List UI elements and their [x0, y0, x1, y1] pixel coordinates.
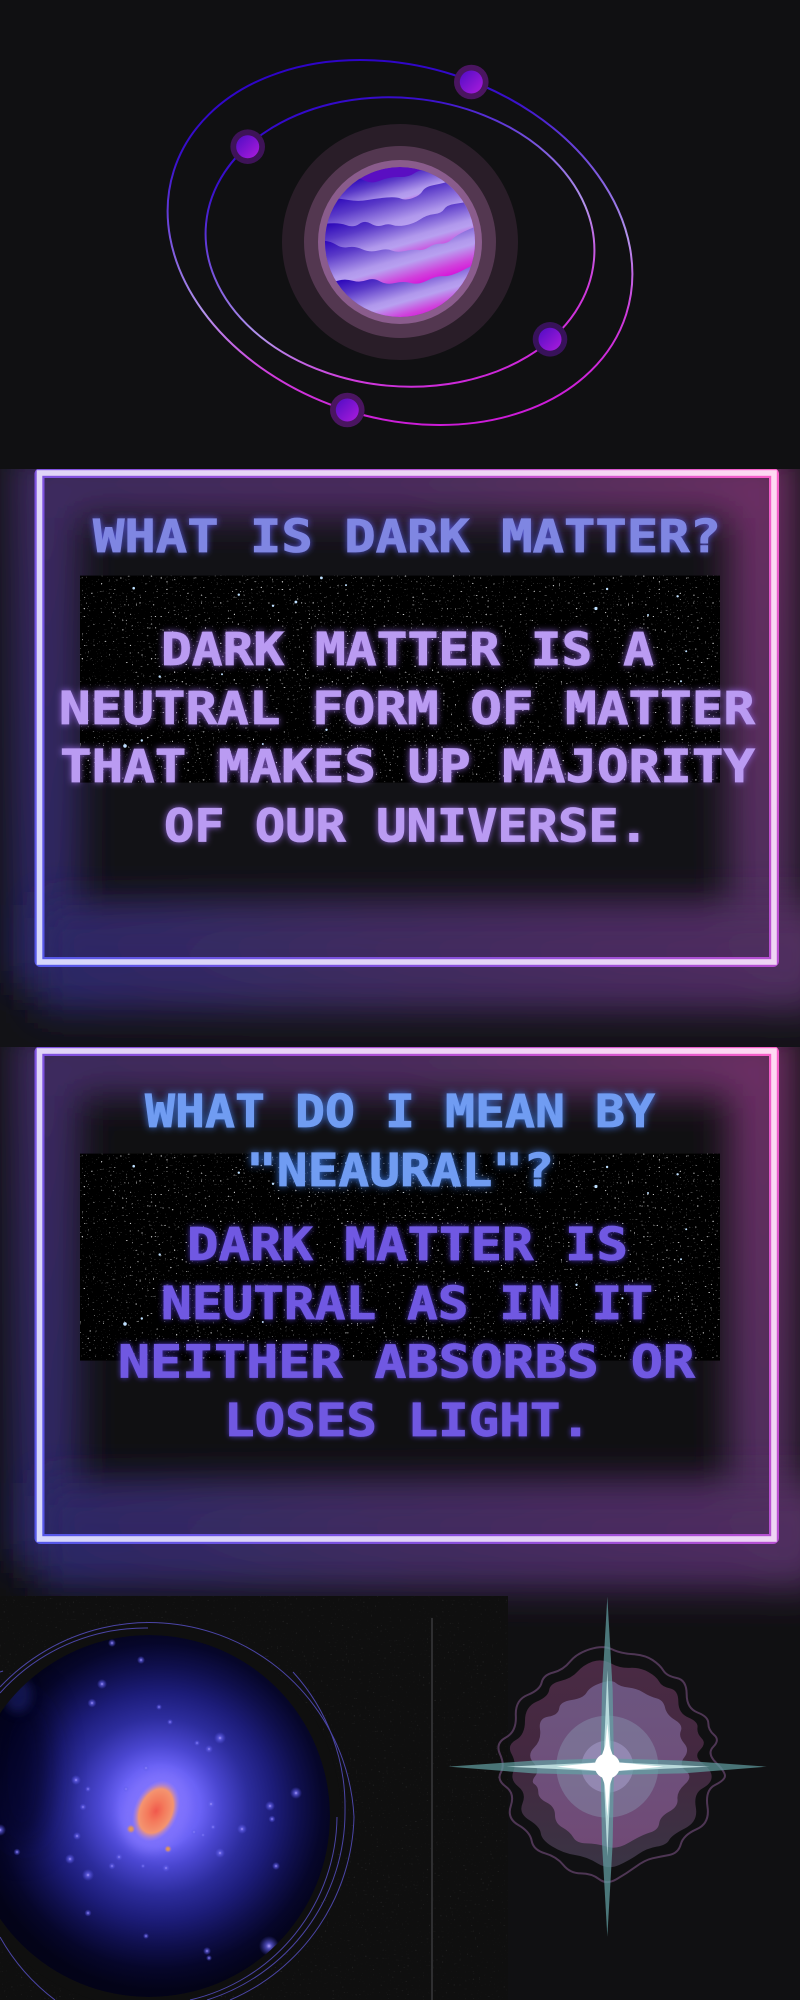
body text: DARK MATTER IS A: [161, 623, 654, 676]
body text: NEITHER ABSORBS OR: [118, 1336, 696, 1388]
star field image: [80, 1154, 720, 1361]
heading: WHAT IS DARK MATTER?: [93, 510, 721, 563]
planet disc with wavy bands: [322, 163, 480, 320]
illustration: planet with orbits: [166, 59, 634, 428]
neon frame: [40, 473, 774, 962]
panel: bottom left galaxy backdrop: [0, 1596, 508, 2000]
heading: WHAT DO I MEAN BY: [145, 1085, 656, 1138]
neon glow backdrop: [0, 1047, 800, 1630]
image: dark matter halo galaxy: [0, 1623, 354, 2000]
wavy halo layers: [498, 1647, 725, 1882]
star field image: [80, 576, 720, 783]
body text: OF OUR UNIVERSE.: [164, 800, 649, 852]
neon glow backdrop: [0, 469, 800, 1047]
panel: what do I mean by neutral: [0, 1047, 800, 1630]
galaxy core: [120, 1771, 190, 1854]
body text: NEUTRAL AS IN IT: [161, 1277, 653, 1330]
neon frame: [40, 1051, 774, 1539]
icon: bright star with wavy halo: [448, 1597, 767, 1937]
heading: "NEAURAL"?: [246, 1144, 554, 1197]
heading: [145, 1085, 656, 1197]
body text: THAT MAKES UP MAJORITY: [60, 740, 756, 793]
panel: what is dark matter: [0, 469, 800, 1047]
body text: DARK MATTER IS: [187, 1218, 628, 1271]
body text: [118, 1218, 696, 1447]
orbit: outer: [121, 3, 679, 482]
planet halo rings: [282, 124, 518, 360]
moons on the orbits: [230, 65, 567, 427]
body text: [59, 623, 756, 852]
orbit: inner: [192, 80, 608, 404]
thin orbit rings: [0, 1623, 354, 2000]
star spikes: [448, 1597, 767, 1937]
body text: NEUTRAL FORM OF MATTER: [59, 682, 756, 735]
body text: LOSES LIGHT.: [224, 1394, 591, 1447]
